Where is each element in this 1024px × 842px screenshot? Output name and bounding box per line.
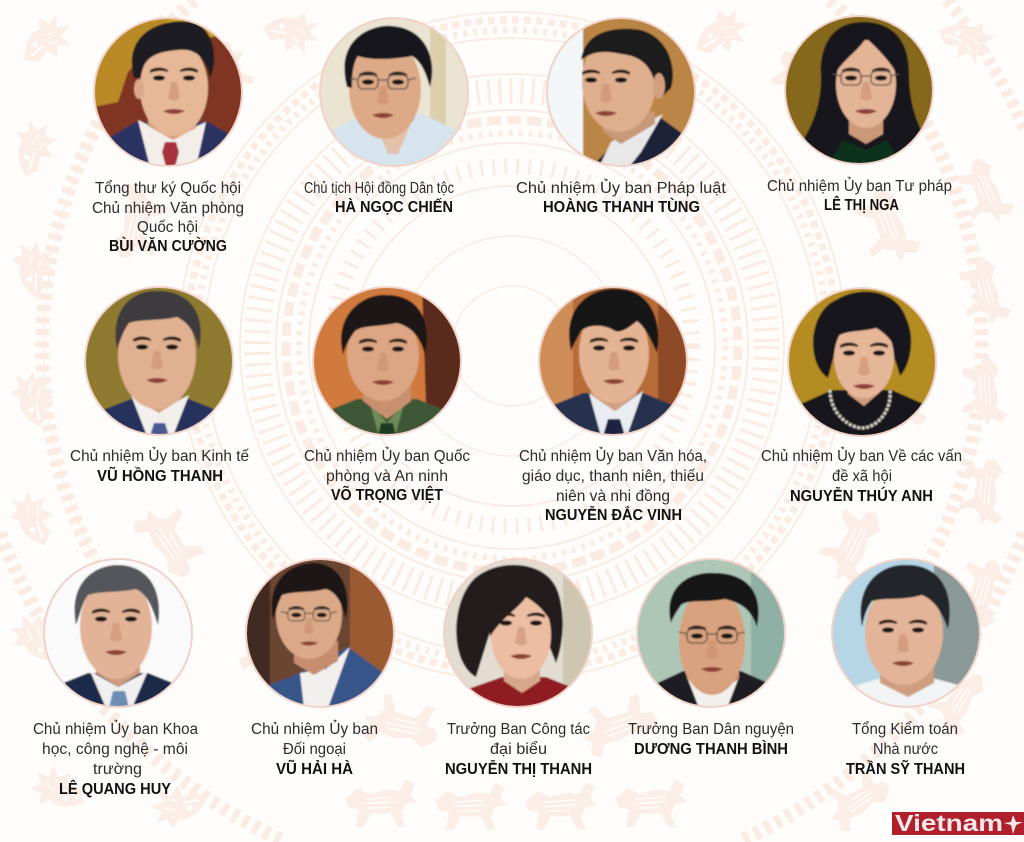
person: Lê Quang Huy [33, 558, 198, 798]
role: Lê Thị Nga: Chủ nhiệm Ủy ban Tư pháp [767, 177, 952, 195]
person: Trần Sỹ Thanh [831, 558, 981, 778]
person: Hoàng Thanh Tùng [516, 17, 727, 216]
role: Bùi Văn Cường: Quốc hội [137, 219, 198, 236]
name: Lê Quang Huy: LÊ QUANG HUY [59, 780, 172, 798]
role: Vũ Hải Hà: Chủ nhiệm Ủy ban [251, 720, 378, 738]
role: Bùi Văn Cường: Tổng thư ký Quốc hội [95, 180, 241, 197]
name: Vũ Hải Hà: VŨ HẢI HÀ [276, 760, 353, 778]
portrait: Nguyễn Thúy Anh [787, 287, 937, 437]
role: Vũ Hồng Thanh: Chủ nhiệm Ủy ban Kinh tế [70, 447, 249, 465]
portrait: Nguyễn Thị Thanh [443, 558, 593, 708]
person: Bùi Văn Cường [92, 14, 244, 255]
portrait: Trần Sỹ Thanh [831, 558, 981, 708]
portrait: Hoàng Thanh Tùng [546, 17, 696, 167]
role: Lê Quang Huy: Chủ nhiệm Ủy ban Khoa [33, 720, 198, 738]
name: Dương Thanh Bình: DƯƠNG THANH BÌNH [634, 741, 788, 758]
portrait: Bùi Văn Cường [93, 14, 243, 167]
portrait: Lê Quang Huy [43, 558, 193, 708]
name: Vũ Hồng Thanh: VŨ HỒNG THANH [97, 467, 223, 485]
logo: Vietnam+ [892, 810, 1024, 836]
role: Nguyễn Đắc Vinh: giáo dục, thanh niên, thiếu [522, 468, 704, 485]
person: Nguyễn Thúy Anh [761, 287, 962, 505]
person: Vũ Hải Hà [245, 558, 395, 778]
portrait: Lê Thị Nga [784, 15, 934, 165]
logo: Vietnam+: Vietnam [895, 810, 1003, 836]
name: Nguyễn Thị Thanh: NGUYỄN THỊ THANH [445, 761, 592, 778]
role: Võ Trọng Việt [304, 447, 470, 485]
role: Nguyễn Thị Thanh: Trưởng Ban Công tác [447, 721, 590, 738]
role: Bùi Văn Cường: Chủ nhiệm Văn phòng [92, 200, 244, 217]
person: Lê Thị Nga [767, 15, 952, 214]
portrait: Dương Thanh Bình [636, 558, 786, 708]
role: Nguyễn Đắc Vinh: Chủ nhiệm Ủy ban Văn hóa, [519, 447, 707, 465]
role: Lê Quang Huy: trường [93, 761, 142, 778]
person: Dương Thanh Bình [628, 558, 794, 758]
portrait: Vũ Hải Hà [245, 558, 395, 708]
person: Nguyễn Thị Thanh [443, 558, 593, 778]
role: Nguyễn Thúy Anh: đề xã hội [832, 468, 892, 485]
portrait: Hà Ngọc Chiến [319, 17, 469, 167]
role: Võ Trọng Việt: phòng và An ninh [326, 468, 448, 485]
role: Trần Sỹ Thanh: Tổng Kiểm toán [852, 721, 958, 738]
role: Bùi Văn Cường [92, 180, 244, 236]
role: Lê Quang Huy: học, công nghệ - môi [42, 741, 188, 758]
role: Trần Sỹ Thanh: Nhà nước [873, 741, 938, 758]
role: Trần Sỹ Thanh [852, 721, 958, 758]
name: Trần Sỹ Thanh: TRẦN SỸ THANH [846, 760, 965, 778]
name: Lê Thị Nga: LÊ THỊ NGA [824, 196, 899, 214]
role: Nguyễn Thị Thanh: đại biểu [490, 741, 547, 758]
portrait: Vũ Hồng Thanh [84, 286, 234, 436]
person: Nguyễn Đắc Vinh [519, 286, 707, 524]
name: Hoàng Thanh Tùng: HOÀNG THANH TÙNG [543, 198, 700, 216]
portrait: Nguyễn Đắc Vinh [538, 286, 688, 436]
person: Vũ Hồng Thanh [70, 286, 249, 485]
person: Hà Ngọc Chiến [304, 17, 469, 216]
role: Nguyễn Thị Thanh [447, 721, 590, 758]
person: Võ Trọng Việt [304, 286, 470, 504]
role: Vũ Hải Hà [251, 720, 378, 758]
name: Nguyễn Thúy Anh: NGUYỄN THÚY ANH [790, 487, 933, 505]
role: Nguyễn Đắc Vinh [519, 447, 707, 505]
role: Lê Quang Huy [33, 720, 198, 778]
name: Võ Trọng Việt: VÕ TRỌNG VIỆT [331, 486, 443, 504]
portrait: Võ Trọng Việt [312, 286, 462, 436]
role: Vũ Hải Hà: Đối ngoại [283, 741, 346, 758]
role: Võ Trọng Việt: Chủ nhiệm Ủy ban Quốc [304, 447, 470, 465]
name: Hà Ngọc Chiến: HÀ NGỌC CHIẾN [335, 199, 453, 216]
role: Nguyễn Thúy Anh: Chủ nhiệm Ủy ban Về các vấn [761, 447, 962, 465]
name: Nguyễn Đắc Vinh: NGUYỄN ĐẮC VINH [545, 506, 682, 524]
role: Nguyễn Đắc Vinh: niên và nhi đồng [556, 488, 670, 505]
role: Hà Ngọc Chiến: Chủ tịch Hội đồng Dân tộc [304, 180, 454, 197]
role: Dương Thanh Bình: Trưởng Ban Dân nguyện [628, 721, 794, 738]
name: Bùi Văn Cường: BÙI VĂN CƯỜNG [109, 237, 227, 255]
role: Hoàng Thanh Tùng: Chủ nhiệm Ủy ban Pháp luật [516, 179, 727, 197]
role: Nguyễn Thúy Anh [761, 447, 962, 485]
